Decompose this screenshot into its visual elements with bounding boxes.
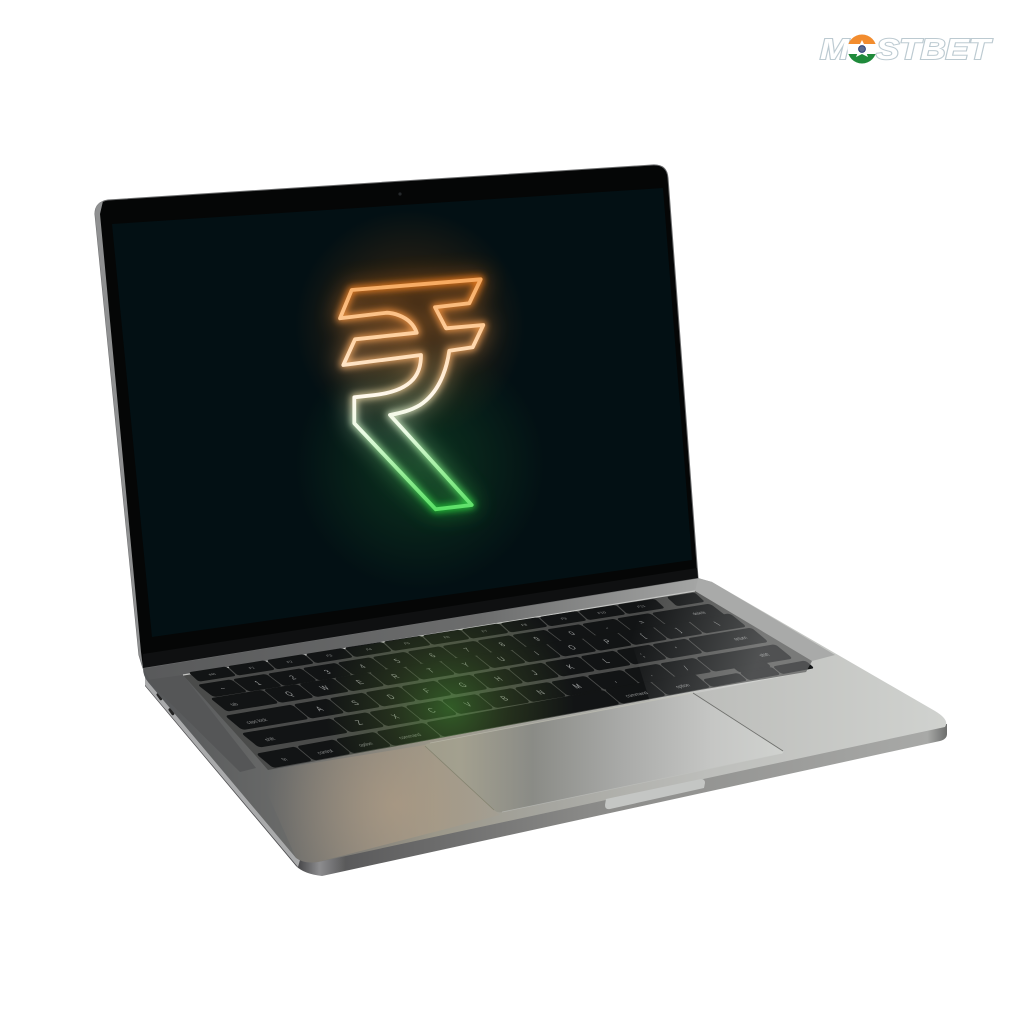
key row: function keys: [190, 593, 704, 681]
key row: ASDF: H: [491, 675, 505, 683]
logo: Mostbet: [820, 34, 993, 66]
key row: QWERTY: [: [638, 633, 649, 639]
key row: ZXCV: shift: [264, 737, 278, 743]
deck warm reflection: [258, 745, 500, 862]
key row: modifiers and arrows: command: [624, 691, 650, 699]
key row: ASDF: K: [563, 663, 577, 671]
deck band behind keyboard: [143, 578, 712, 680]
screen: [112, 188, 692, 637]
rupee neon line: [340, 279, 483, 509]
key row: ZXCV: V: [461, 700, 475, 708]
key row: numbers: 2: [287, 674, 298, 681]
key row: ZXCV: /: [681, 664, 692, 672]
key row: ZXCV: X: [388, 712, 402, 720]
keyboard: [183, 591, 813, 770]
key row: QWERTY: T: [425, 667, 437, 674]
screen green glow: [112, 188, 692, 637]
key row: QWERTY: \: [712, 621, 723, 627]
key row: QWERTY: P: [601, 638, 614, 645]
key row: ZXCV: N: [534, 688, 548, 696]
key row: numbers: 6: [426, 652, 439, 659]
key row: function keys: F10: [596, 610, 608, 615]
key row: ZXCV: [243, 645, 792, 747]
key row: function keys: esc: [207, 672, 217, 676]
key row: numbers: [199, 604, 725, 697]
key row: function keys: F2: [285, 660, 295, 664]
key row: ZXCV: ,: [608, 676, 619, 684]
key row: modifiers and arrows: option: [357, 742, 375, 748]
key row: QWERTY: O: [566, 644, 579, 651]
key row: modifiers and arrows: [257, 655, 813, 767]
laptop deck: [143, 578, 946, 862]
key row: numbers: ~: [217, 685, 229, 692]
trackpad edge lines: [425, 693, 783, 812]
laptop base side edge: [145, 676, 947, 876]
key row: QWERTY: tab: [229, 702, 241, 707]
key row: function keys: F8: [520, 623, 529, 627]
key row: QWERTY: W: [317, 684, 332, 692]
key row: ASDF: A: [312, 705, 326, 713]
key row: QWERTY: R: [389, 673, 402, 680]
key row: ZXCV: .: [644, 670, 655, 678]
key row: function keys: F7: [480, 629, 489, 633]
key row: modifiers and arrows: option: [674, 683, 692, 690]
key row: QWERTY: Q: [283, 690, 296, 697]
key row: function keys: F6: [442, 635, 452, 639]
laptop left silver edge: [145, 676, 300, 867]
right speaker strip: [695, 579, 835, 661]
key row: function keys: F9: [559, 617, 569, 621]
key row: numbers: 1: [252, 680, 264, 686]
rupee wide glow: [340, 279, 483, 509]
key row: QWERTY: U: [495, 656, 508, 663]
key row: ASDF: J: [528, 669, 540, 677]
key row: ZXCV: Z: [352, 719, 365, 726]
webcam: [398, 192, 402, 196]
key row: ASDF: return: [732, 636, 750, 642]
key row: numbers: =: [636, 619, 648, 626]
lid body: [95, 165, 698, 668]
key row: numbers: 8: [496, 641, 508, 648]
key row: numbers: -: [602, 625, 612, 631]
key row: QWERTY: ]: [674, 627, 683, 634]
neon rupee symbol: [340, 279, 483, 509]
key row: numbers: delete: [691, 611, 709, 616]
logo wordmark: MOSTBET: [820, 34, 993, 66]
key row: numbers: 7: [461, 647, 473, 653]
key row: function keys: F1: [247, 666, 257, 670]
key row: QWERTY: E: [354, 679, 367, 686]
trackpad: [425, 693, 783, 812]
key row: function keys: F11: [636, 604, 647, 608]
key row: ZXCV: shift: [758, 653, 772, 658]
USB ports: [156, 693, 175, 716]
key row: numbers: 0: [566, 630, 578, 637]
key row: ASDF: [226, 628, 767, 729]
key row: ASDF: D: [384, 693, 398, 701]
hinge strip: [143, 568, 698, 668]
key row: QWERTY: Y: [460, 661, 473, 668]
left speaker grille: [147, 675, 256, 772]
key row: QWERTY: [212, 614, 745, 711]
thumb notch: [605, 779, 705, 809]
laptop lid: [95, 165, 698, 668]
lid left edge: [95, 201, 143, 668]
key row: ASDF: L: [600, 657, 612, 665]
key row: function keys: F5: [403, 641, 412, 645]
key row: ZXCV: B: [497, 694, 511, 702]
key row: ZXCV: M: [570, 682, 584, 690]
key row: numbers: 5: [391, 658, 404, 664]
well top highlight: [183, 591, 695, 675]
keyboard green glow: [183, 591, 812, 770]
key row: ZXCV: C: [425, 706, 438, 714]
logo flag circle: [847, 34, 877, 64]
key row: ASDF: G: [455, 681, 470, 689]
key row: QWERTY: I: [532, 650, 542, 657]
keyboard right sheen: [620, 591, 812, 702]
key row: ASDF: ': [673, 645, 683, 652]
key row: ASDF: ;: [636, 651, 647, 658]
laptop: [95, 165, 947, 876]
rupee near glow: [340, 279, 483, 509]
key row: modifiers and arrows: fn: [281, 757, 290, 762]
key row: function keys: F3: [325, 654, 334, 658]
key row: numbers: 9: [531, 636, 543, 642]
key row: ASDF: caps lock: [245, 718, 270, 725]
key row: ASDF: F: [420, 687, 433, 695]
key row: modifiers and arrows: control: [316, 749, 335, 756]
key row: numbers: 4: [357, 663, 369, 670]
key row: numbers: 3: [322, 669, 334, 675]
key row: function keys: F4: [365, 647, 374, 651]
key row: modifiers and arrows: command: [397, 733, 424, 741]
keyboard well: [183, 591, 812, 770]
screen orange glow: [112, 188, 692, 637]
key row: ASDF: S: [348, 699, 362, 707]
